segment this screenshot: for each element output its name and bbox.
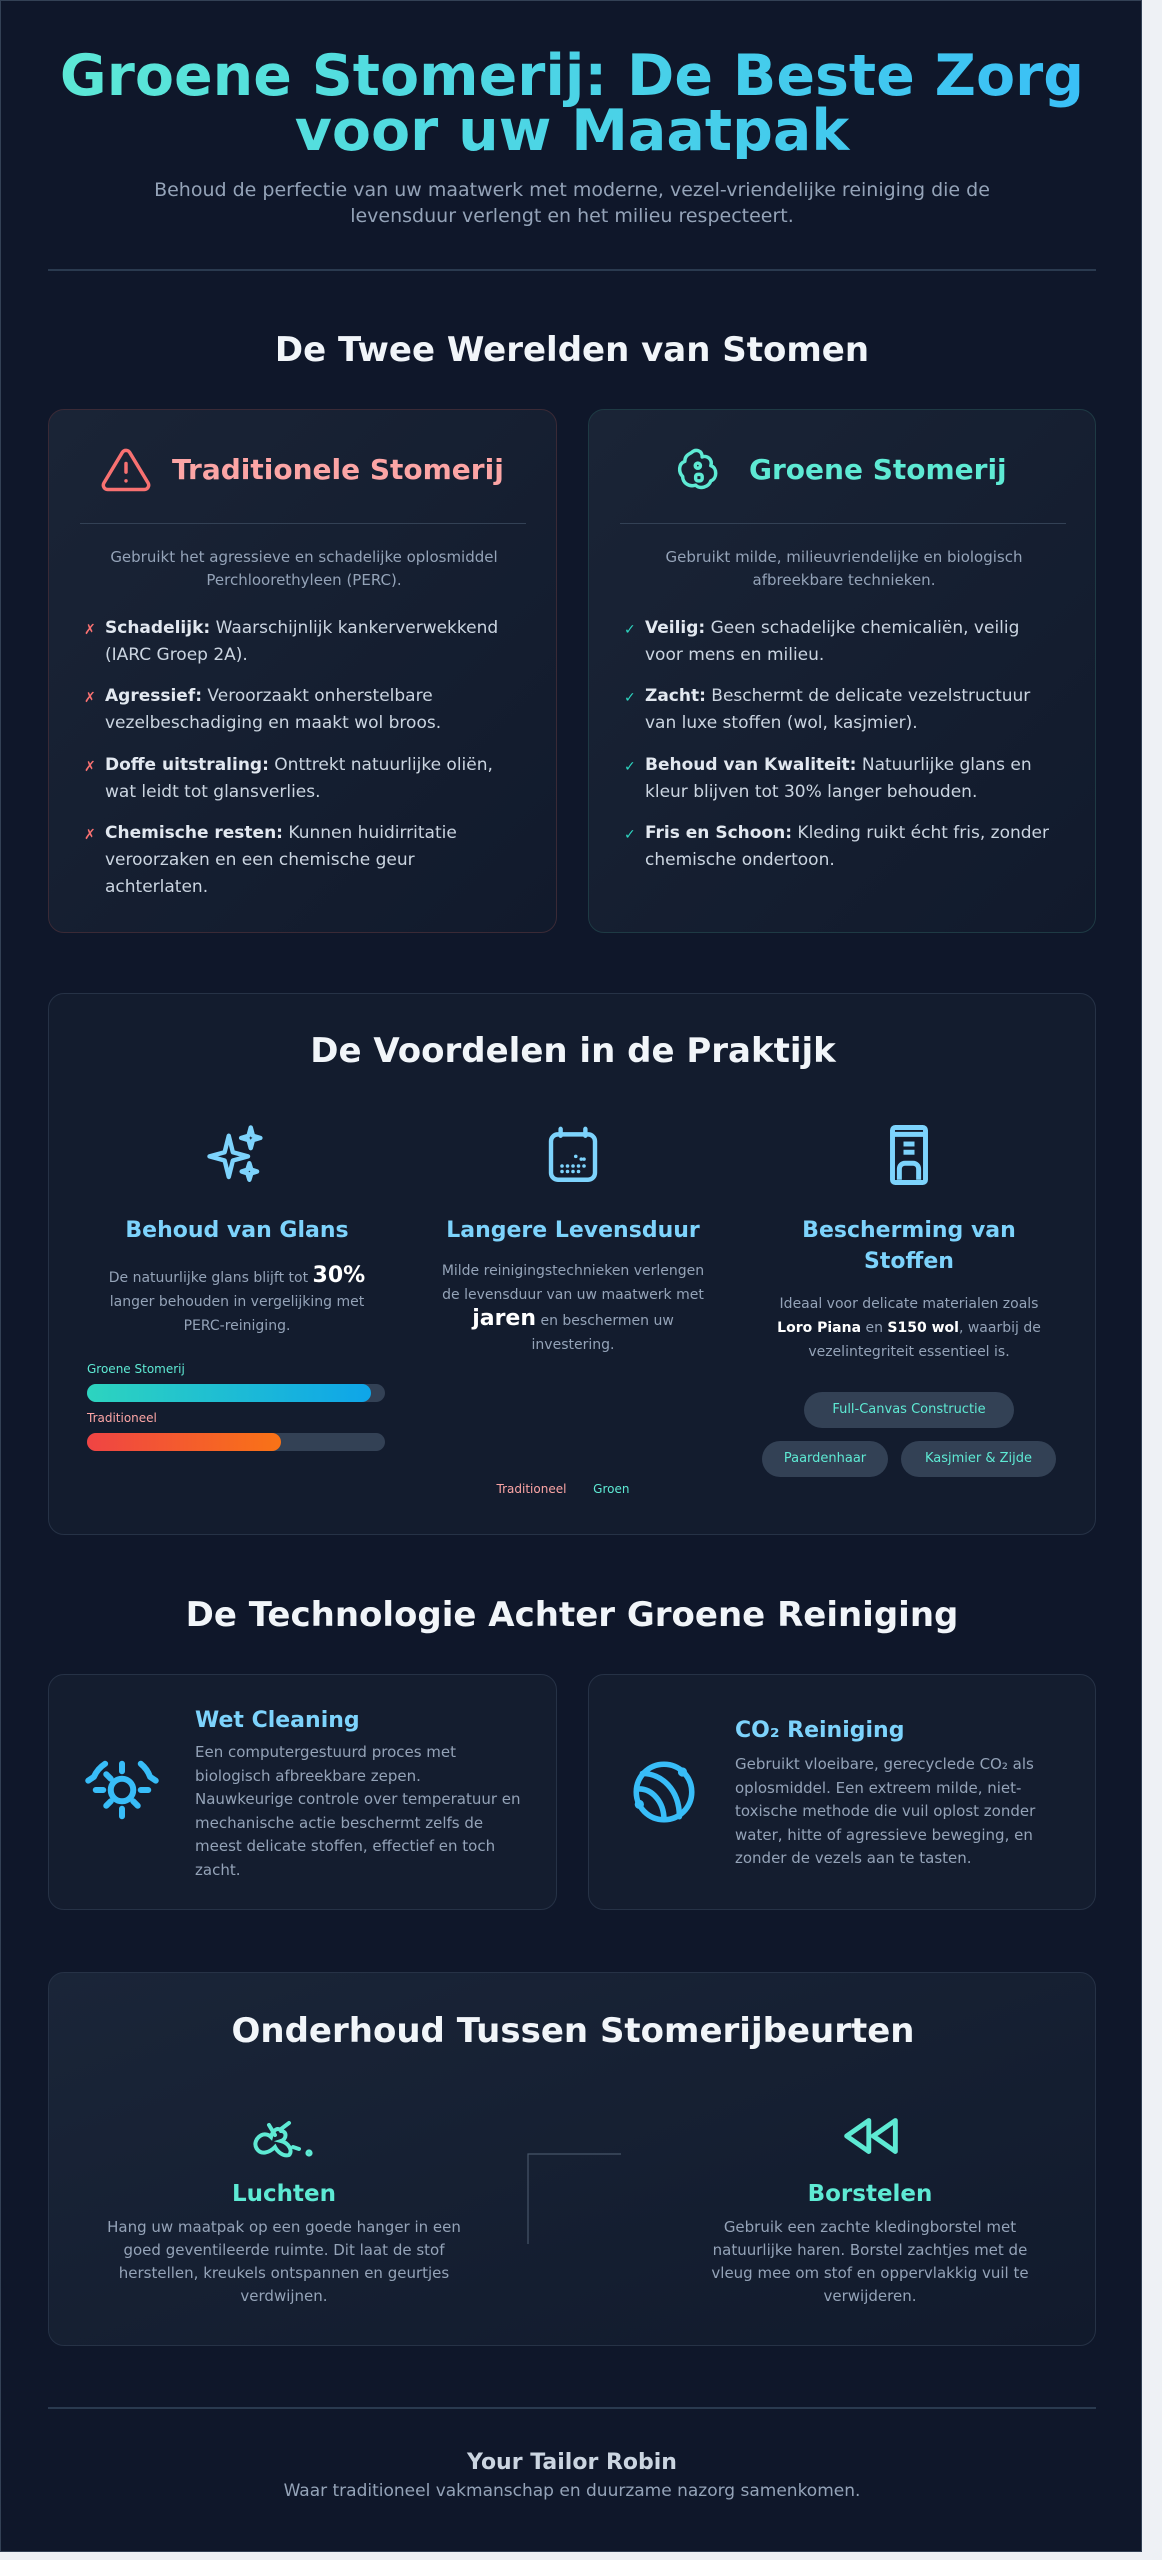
text: Een computergestuurd proces met [195, 1743, 456, 1761]
heading: two worlds: De Twee Werelden van Stomen [275, 330, 869, 370]
text: Gebruik een zachte kledingborstel met natuurlijke haren. Borstel zachtjes met de vleug mee om stof en oppervlakkig vuil te verwijderen. [711, 2218, 1029, 2305]
panel: CO2 cleaning [588, 1674, 1096, 1910]
title: Behoud van Glans [125, 1218, 349, 1243]
text: Gebruikt vloeibare, gerecyclede CO₂ als oplosmiddel. Een extreem milde, niet-toxische methode die vuil oplost zonder water, hitte of agressieve beweging, en zonder de vezels aan te tasten. [735, 1755, 1035, 1867]
icon: calendar [548, 1126, 598, 1182]
heading: Onderhoud Tussen Stomerijbeurten [231, 2011, 914, 2051]
panel: traditional [48, 409, 557, 933]
tags: Full-Canvas Constructie [832, 1402, 986, 1417]
list: benefits: ✓ [624, 827, 636, 843]
title: Wet Cleaning [195, 1708, 360, 1733]
list: harms: achterlaten. [105, 877, 208, 897]
text: De natuurlijke glans blijft tot 30% langer behouden in vergelijking met PERC-reiniging. [109, 1263, 365, 1334]
icon: sparkles [207, 1125, 263, 1182]
chart: shine bars [86, 1362, 385, 1451]
icon: garment cabinet [890, 1125, 928, 1185]
title: CO₂ Reiniging [735, 1718, 904, 1743]
heading: De Voordelen in de Praktijk [310, 1031, 836, 1071]
step: brushing [711, 2118, 1029, 2305]
icon: warning [102, 448, 150, 492]
panel: benefits in practice [48, 993, 1096, 1535]
tags: Kasjmier & Zijde [925, 1451, 1032, 1466]
title: voor uw Maatpak [295, 98, 849, 164]
panel: maintenance [48, 1972, 1096, 2346]
title [1, 49, 1143, 159]
title: Groene Stomerij: De Beste Zorg [60, 43, 1084, 109]
list: harms: Agressief: Veroorzaakt onherstelbare vezelbeschadiging en maakt wol broos. [105, 686, 441, 733]
panel: green [588, 409, 1096, 933]
legend: Traditioneel Groen [497, 1482, 629, 1496]
list: benefits: ✓ [624, 690, 636, 706]
list: benefits: Zacht: Beschermt de delicate vezelstructuur van luxe stoffen (wol, kasjmier). [645, 686, 1030, 733]
list: benefits: Behoud van Kwaliteit: Natuurlijke glans en kleur blijven tot 30% langer behouden. [645, 755, 1032, 802]
list: harms: ✗ [84, 759, 96, 775]
text: biologisch afbreekbare zepen. [195, 1766, 421, 1784]
list: harms: Chemische resten: Kunnen huidirritatie veroorzaken en een chemische geur [105, 823, 457, 870]
text: zacht. [195, 1860, 240, 1878]
tags: Paardenhaar [784, 1451, 866, 1466]
column: fabric protection [762, 1125, 1056, 1477]
text: Nauwkeurige controle over temperatuur en [195, 1790, 521, 1808]
list: benefits [624, 618, 1049, 870]
subtitle: Behoud de perfectie van uw maatwerk met moderne, vezel-vriendelijke reiniging die de levensduur verlengt en het milieu respecteert. [154, 179, 990, 227]
list: harms: Doffe uitstraling: Onttrekt natuurlijke oliën, wat leidt tot glansverlies. [105, 755, 493, 802]
footer: Waar traditioneel vakmanschap en duurzame nazorg samenkomen. [284, 2481, 860, 2501]
text: description: Gebruikt het agressieve en schadelijke oplosmiddel Perchloorethyleen (PERC). [110, 548, 498, 589]
text: Ideaal voor delicate materialen zoals Loro Piana en S150 wol, waarbij de vezelintegriteit essentieel is. [777, 1296, 1041, 1360]
list: harms: ✗ [84, 690, 96, 706]
icon: wet cleaning [85, 1760, 159, 1820]
icon: airing [253, 2120, 313, 2158]
text: Hang uw maatpak op een goede hanger in een goed geventileerde ruimte. Dit laat de stof herstellen, kreukels ontspannen en geurtjes verdwijnen. [107, 2218, 461, 2305]
chart: shine bars: Traditioneel [87, 1411, 157, 1425]
icon: sphere [634, 1762, 694, 1822]
step: airing [107, 2120, 461, 2305]
footer: Your Tailor Robin [467, 2450, 677, 2475]
title: Bescherming van [802, 1218, 1016, 1243]
icon: leaf blob [678, 448, 718, 490]
list: harms [84, 618, 498, 897]
title: Stoffen [864, 1249, 954, 1274]
title [802, 1218, 1016, 1274]
text: meest delicate stoffen, effectief en toch [195, 1837, 495, 1855]
list: benefits: ✓ [624, 622, 636, 638]
list: benefits: Fris en Schoon: Kleding ruikt écht fris, zonder chemische ondertoon. [645, 823, 1049, 870]
tags [762, 1392, 1056, 1477]
title: Langere Levensduur [446, 1218, 700, 1243]
list: benefits: voor mens en milieu. [645, 645, 824, 665]
footer [284, 2450, 860, 2501]
chart: shine bars: Groene Stomerij [87, 1362, 185, 1376]
title: Luchten [232, 2181, 336, 2207]
text: mechanische actie beschermt zelfs de [195, 1814, 483, 1832]
icon: rewind [844, 2118, 898, 2154]
panel: wet cleaning [48, 1674, 557, 1910]
heading: green: Groene Stomerij [749, 453, 1007, 486]
text: Milde reinigingstechnieken verlengen de levensduur van uw maatwerk met jaren en beschermen uw investering. [442, 1263, 704, 1353]
list: benefits: ✓ [624, 759, 636, 775]
list: harms: ✗ [84, 622, 96, 638]
text [195, 1743, 521, 1878]
heading: technology: De Technologie Achter Groene Reiniging [186, 1595, 958, 1635]
text: description: Gebruikt milde, milieuvriendelijke en biologisch afbreekbare technieken. [666, 548, 1022, 589]
column: shine [86, 1125, 385, 1451]
list: harms: Schadelijk: Waarschijnlijk kankerverwekkend (IARC Groep 2A). [105, 618, 498, 665]
column: lifespan [442, 1126, 704, 1496]
connector [527, 2153, 621, 2244]
title: Borstelen [808, 2181, 932, 2207]
list: benefits: Veilig: Geen schadelijke chemicaliën, veilig [645, 618, 1019, 638]
list: harms: ✗ [84, 827, 96, 843]
heading: traditional: Traditionele Stomerij [172, 453, 504, 486]
